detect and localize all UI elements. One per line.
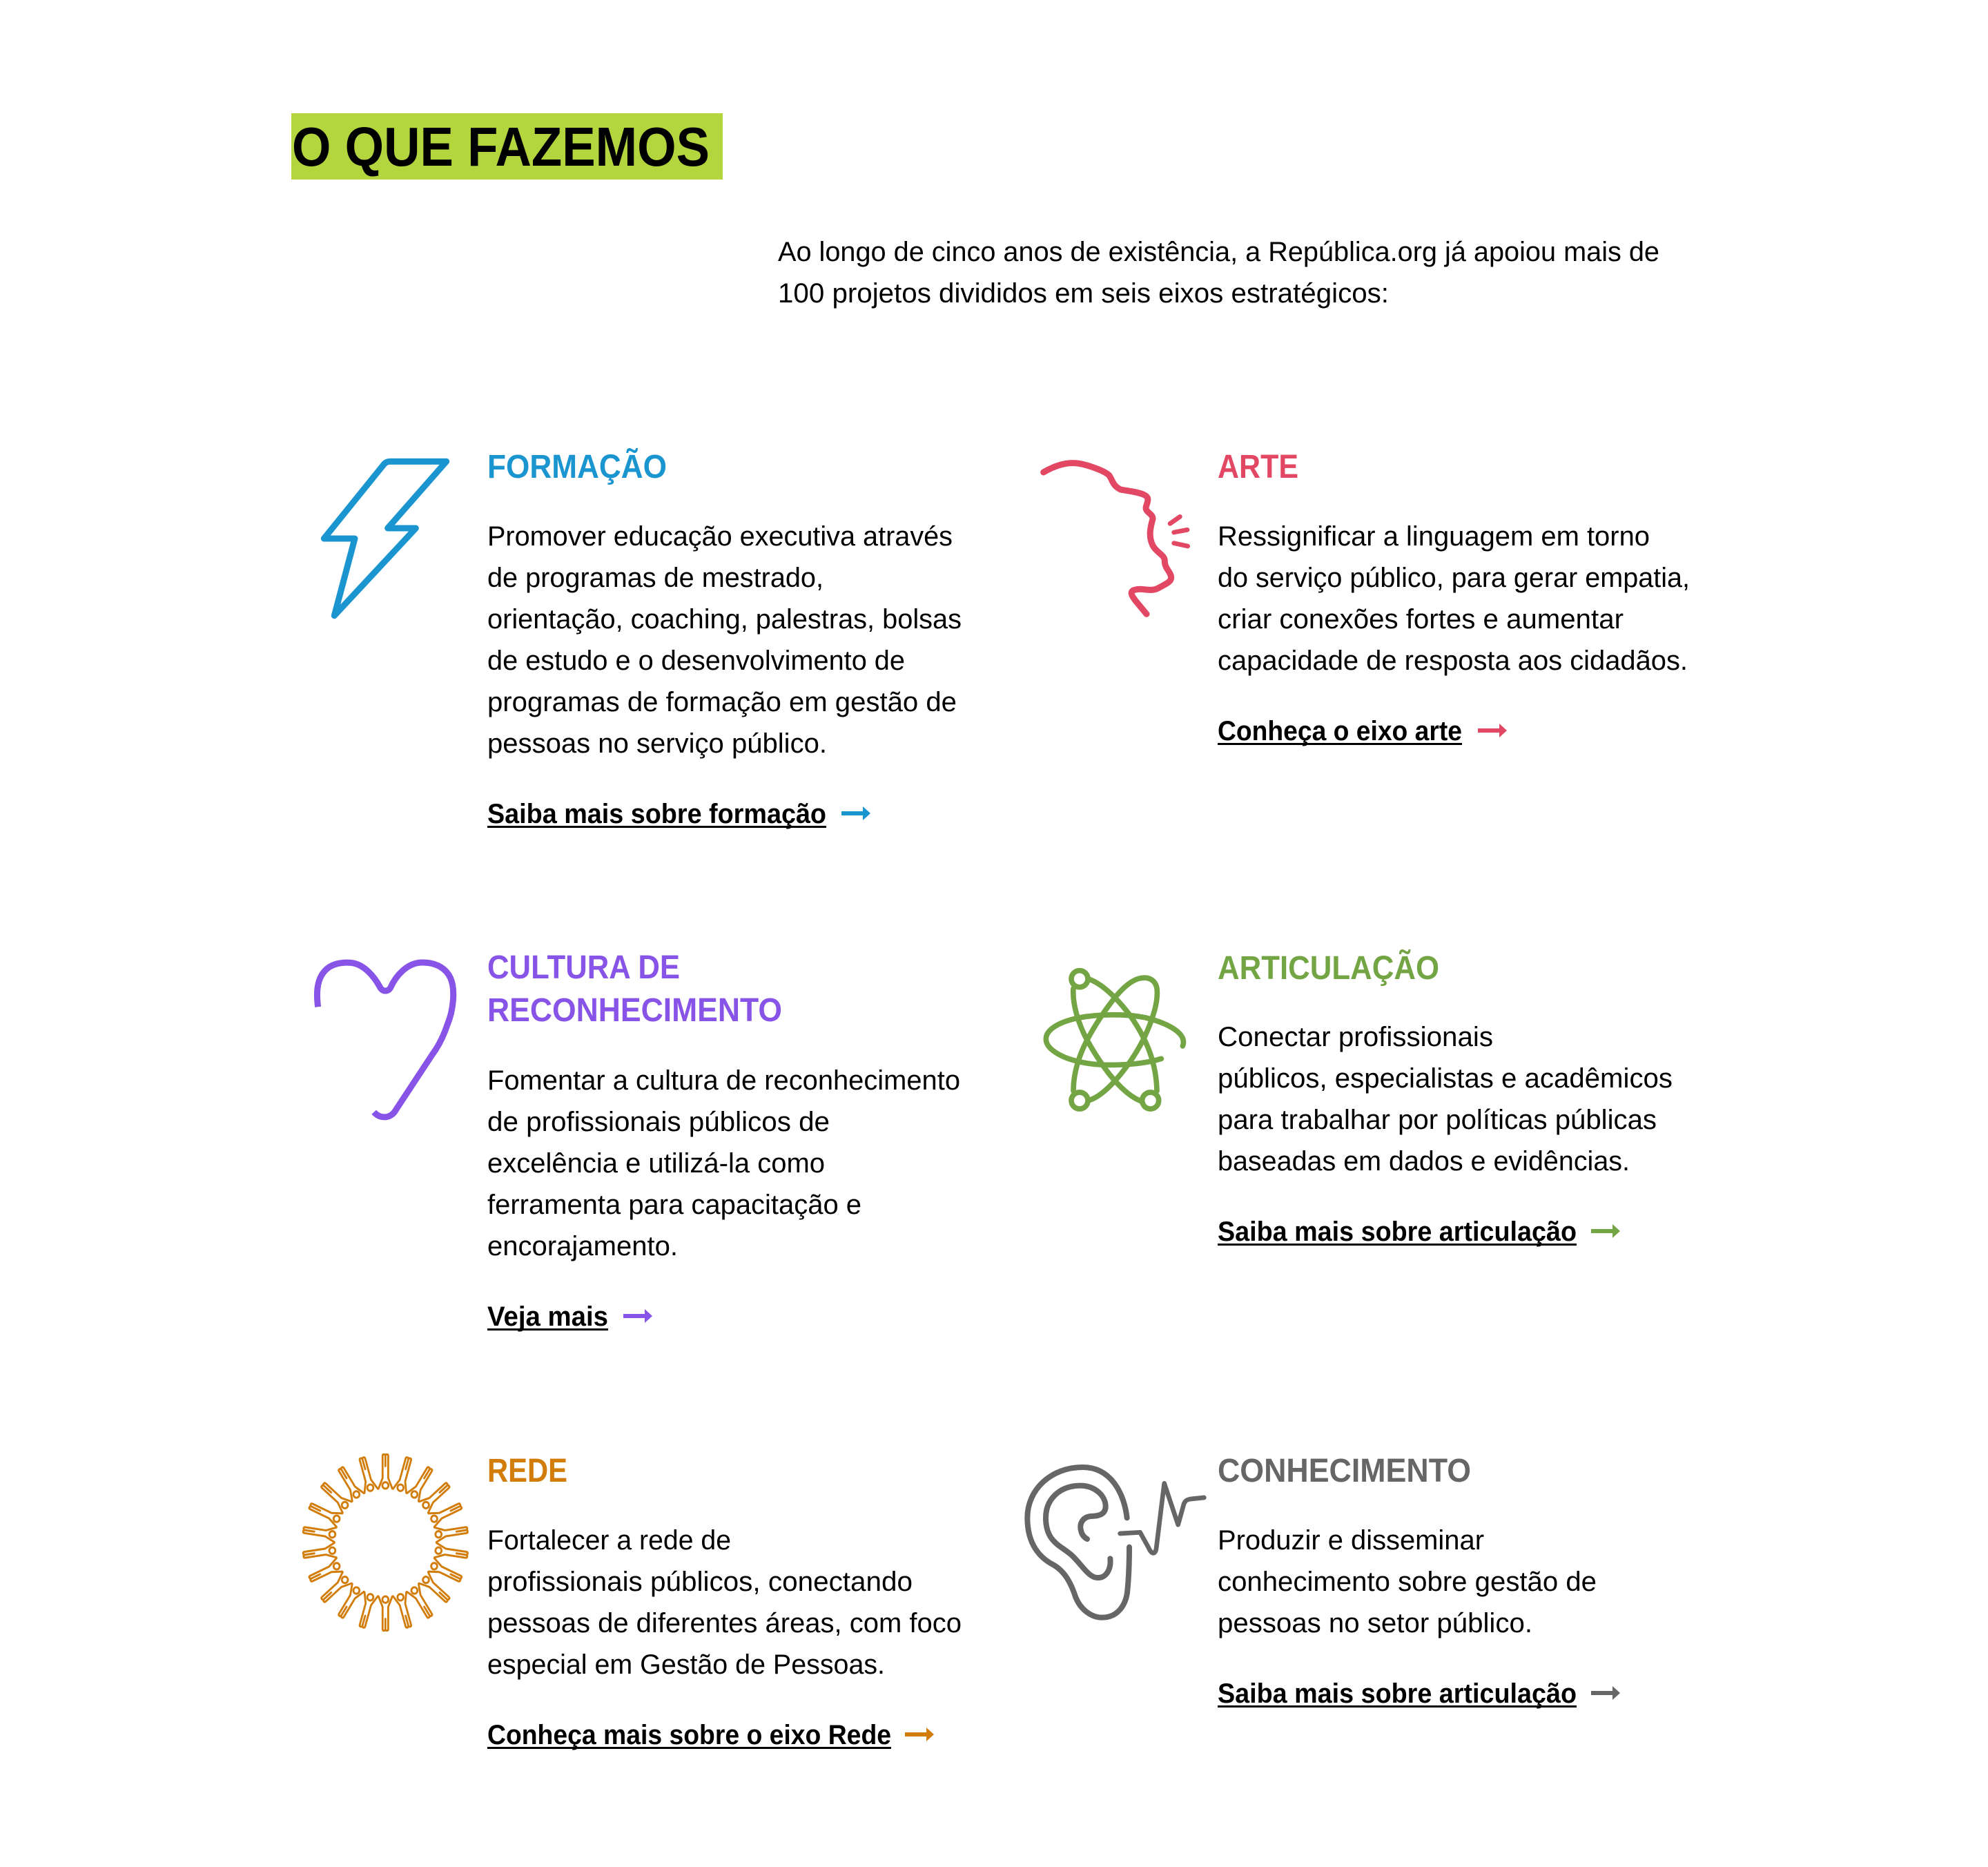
intro text: 100 projetos divididos em seis eixos estratégicos: xyxy=(778,278,1389,309)
link: veja mais: Veja mais xyxy=(487,1302,608,1332)
text: formação description: de estudo e o desenvolvimento de xyxy=(487,646,905,676)
text: cultura description xyxy=(487,1065,960,1261)
text: conhecimento description: Produzir e disseminar xyxy=(1218,1525,1484,1556)
text: formação description: Promover educação executiva através xyxy=(487,521,953,552)
heading: rede: REDE xyxy=(487,1453,567,1489)
text: rede description: profissionais públicos, conectando xyxy=(487,1567,913,1597)
icon: open heart xyxy=(317,962,454,1117)
text: formação description: programas de formação em gestão de xyxy=(487,687,957,717)
link: saiba mais sobre articulação: Saiba mais sobre articulação xyxy=(1218,1217,1577,1247)
heading: articulação: ARTICULAÇÃO xyxy=(1218,949,1439,987)
text: arte description xyxy=(1218,521,1690,676)
arrow: cultura xyxy=(623,1309,652,1323)
text: rede description: especial em Gestão de Pessoas. xyxy=(487,1650,885,1680)
heading: cultura de reconhecimento xyxy=(487,949,782,1029)
text: conhecimento description: pessoas no setor público. xyxy=(1218,1608,1532,1638)
arrow: formação xyxy=(841,806,870,820)
link: conheça o eixo arte: Conheça o eixo arte xyxy=(1218,716,1462,746)
text: cultura description: excelência e utilizá-la como xyxy=(487,1148,825,1179)
panel: articulação xyxy=(1046,949,1673,1247)
panel: conhecimento xyxy=(1027,1453,1620,1709)
intro text xyxy=(778,237,1659,309)
heading: cultura de reconhecimento: RECONHECIMENTO xyxy=(487,992,782,1029)
text: rede description: pessoas de diferentes áreas, com foco xyxy=(487,1608,962,1638)
panel: rede xyxy=(302,1453,962,1750)
text: cultura description: de profissionais públicos de xyxy=(487,1107,830,1137)
panel: cultura de reconhecimento xyxy=(317,949,960,1332)
text: conhecimento description: conhecimento sobre gestão de xyxy=(1218,1567,1597,1597)
text: arte description: capacidade de resposta aos cidadãos. xyxy=(1218,646,1688,676)
intro text: Ao longo de cinco anos de existência, a República.org já apoiou mais de xyxy=(778,237,1659,267)
link: saiba mais sobre articulação (conhecimento): Saiba mais sobre articulação xyxy=(1218,1679,1577,1709)
arrow: arte xyxy=(1478,724,1507,737)
text: cultura description: ferramenta para capacitação e xyxy=(487,1190,861,1220)
text: formação description: pessoas no serviço público. xyxy=(487,728,827,759)
text: cultura description: Fomentar a cultura de reconhecimento xyxy=(487,1065,960,1096)
panel: formação xyxy=(324,447,962,829)
arrow: conhecimento xyxy=(1591,1686,1620,1700)
text: arte description: do serviço público, para gerar empatia, xyxy=(1218,563,1690,593)
text: articulação description xyxy=(1218,1022,1673,1177)
title: O QUE FAZEMOS xyxy=(292,116,710,177)
text: cultura description: encorajamento. xyxy=(487,1231,678,1261)
icon: atom xyxy=(1046,971,1183,1109)
arrow: rede xyxy=(905,1728,934,1741)
text: formação description: orientação, coaching, palestras, bolsas xyxy=(487,604,962,635)
heading: conhecimento: CONHECIMENTO xyxy=(1218,1453,1471,1489)
text: articulação description: públicos, especialistas e acadêmicos xyxy=(1218,1063,1673,1094)
icon: lightning bolt xyxy=(324,461,447,616)
link: conheça mais sobre o eixo rede: Conheça mais sobre o eixo Rede xyxy=(487,1720,891,1750)
heading: cultura de reconhecimento: CULTURA DE xyxy=(487,949,680,986)
text: arte description: Ressignificar a linguagem em torno xyxy=(1218,521,1650,552)
panel: arte xyxy=(1044,449,1690,746)
text: conhecimento description xyxy=(1218,1525,1597,1638)
icon: ring of clothespins xyxy=(302,1454,469,1631)
heading: formação: FORMAÇÃO xyxy=(487,447,667,485)
text: rede description xyxy=(487,1525,962,1680)
icon: ear with sound wave xyxy=(1027,1467,1204,1618)
text: rede description: Fortalecer a rede de xyxy=(487,1525,731,1556)
arrow: articulação xyxy=(1591,1224,1620,1238)
text: formação description xyxy=(487,521,962,759)
text: articulação description: para trabalhar por políticas públicas xyxy=(1218,1105,1657,1135)
text: formação description: de programas de mestrado, xyxy=(487,563,824,593)
icon: speaking face profile xyxy=(1044,463,1188,614)
heading: arte: ARTE xyxy=(1218,449,1298,485)
text: articulação description: baseadas em dados e evidências. xyxy=(1218,1146,1630,1177)
text: arte description: criar conexões fortes e aumentar xyxy=(1218,604,1624,635)
text: articulação description: Conectar profissionais xyxy=(1218,1022,1493,1052)
link: saiba mais sobre formação: Saiba mais sobre formação xyxy=(487,799,826,829)
